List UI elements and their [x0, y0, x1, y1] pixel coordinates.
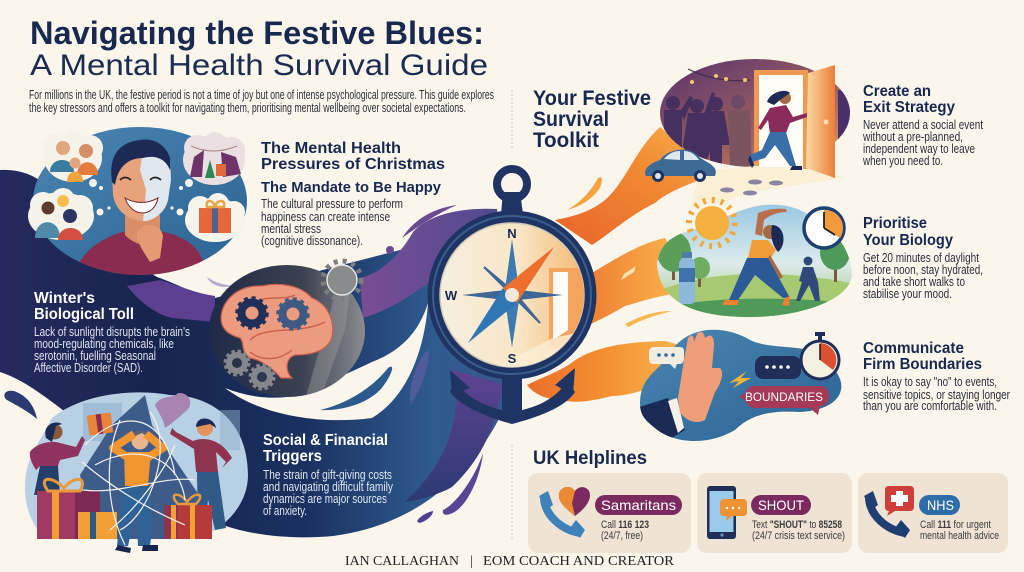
- heading: uk helplines: UK Helplines: [533, 448, 647, 469]
- text block: create an exit strategy: Exit Strategy: [863, 99, 955, 116]
- purple cloud: [155, 393, 190, 428]
- left woman: [30, 423, 85, 495]
- text block: winter's biological toll: [34, 290, 190, 375]
- anchor: [450, 368, 575, 424]
- text block: mandate to be happy: happiness can create intense: [261, 210, 390, 224]
- divider: [511, 90, 513, 540]
- text block: social and financial triggers: [263, 432, 394, 518]
- raised hand: [678, 332, 722, 422]
- compass ring loop: [497, 169, 527, 214]
- title: A Mental Health Survival Guide: [30, 49, 488, 82]
- pill: [919, 495, 960, 515]
- small walker: [796, 256, 820, 301]
- icon: phone with chat: [707, 486, 747, 539]
- text: (24/7, free): [601, 530, 643, 542]
- text block: winter's biological toll: Biological Toll: [34, 306, 134, 323]
- text block: mandate to be happy: mental stress: [261, 222, 321, 236]
- pill: NHS: [927, 497, 954, 513]
- text block: prioritise your biology: Your Biology: [863, 232, 953, 249]
- pill: Samaritans: [601, 497, 676, 513]
- text block: social and financial triggers: Triggers: [263, 448, 322, 465]
- text block: winter's biological toll: Affective Disorder (SAD).: [34, 361, 143, 375]
- text block: winter's biological toll: serotonin, fuelling Seasonal: [34, 349, 156, 363]
- text: Call 111 for urgent: [920, 519, 991, 531]
- pill: [595, 495, 682, 515]
- gift large left: [37, 479, 100, 539]
- footprints: [720, 180, 783, 196]
- compass letters: [445, 226, 517, 366]
- text: [920, 519, 999, 542]
- right tree: [820, 242, 849, 282]
- central person: [113, 430, 163, 553]
- parked car: [645, 150, 716, 182]
- gift right: [164, 495, 212, 539]
- illustration: leaving a party by the exit door: [645, 59, 852, 208]
- sun: [689, 200, 735, 246]
- orange flows to toolkit: [527, 127, 715, 402]
- compass star: [462, 240, 563, 347]
- left trees: [657, 232, 710, 287]
- footer credit: |: [470, 554, 473, 569]
- boundaries label: BOUNDARIES: [745, 390, 823, 404]
- text block: create an exit strategy: without a pre-planned,: [862, 130, 963, 144]
- text block: social and financial triggers: The strain of gift-giving costs: [263, 468, 392, 482]
- heading: your festive survival toolkit: [533, 87, 651, 152]
- text block: communicate firm boundaries: [863, 340, 1010, 413]
- thought cloud: friends: [28, 188, 94, 240]
- text block: communicate firm boundaries: Communicate: [863, 340, 964, 357]
- text block: social and financial triggers: dynamics are major sources: [263, 492, 387, 506]
- heading: your festive survival toolkit: Your Festive: [533, 87, 651, 110]
- text: (24/7 crisis text service): [752, 530, 845, 542]
- text block: winter's biological toll: Winter's: [34, 290, 95, 307]
- text: [752, 519, 845, 542]
- heading: mental health pressures: Pressures of Christmas: [261, 156, 445, 173]
- compass letters: S: [508, 351, 517, 366]
- text block: mandate to be happy: The Mandate to Be Happy: [261, 179, 442, 196]
- crowd silhouettes: [664, 92, 730, 167]
- text block: prioritise your biology: Prioritise: [863, 215, 927, 232]
- stopwatch: [801, 332, 839, 379]
- light floor path: [690, 166, 845, 208]
- illustration: brain with gears: [209, 261, 365, 400]
- illustration: man with smiling mask and thought clouds: [28, 127, 247, 275]
- footer credit: EOM COACH AND CREATOR: [483, 554, 675, 569]
- text block: prioritise your biology: before noon, stay hydrated,: [863, 263, 983, 277]
- thought cloud: gift: [185, 193, 245, 242]
- illustration: daylight, hydration and stretching: [657, 197, 852, 317]
- text block: create an exit strategy: [862, 83, 983, 168]
- gear navy: [237, 298, 267, 328]
- compass letters: N: [507, 226, 517, 241]
- text block: social and financial triggers: of anxiety.: [263, 504, 307, 518]
- heading: mental health pressures: The Mental Health: [261, 140, 401, 157]
- thought cloud: family: [43, 131, 103, 182]
- stretching woman: [722, 209, 790, 306]
- text block: communicate firm boundaries: Firm Boundaries: [863, 356, 982, 373]
- gear grey small: [250, 365, 274, 389]
- title: [30, 15, 488, 82]
- heading: mental health pressures: [261, 140, 445, 173]
- right man: [170, 418, 232, 535]
- left navy and blue flow: [0, 170, 510, 537]
- text block: prioritise your biology: stabilise your mood.: [863, 287, 952, 301]
- clock: [804, 208, 844, 248]
- text block: prioritise your biology: and take short walks to: [863, 275, 965, 289]
- text: Call 116 123: [601, 519, 649, 531]
- sun: [323, 261, 361, 299]
- title: Navigating the Festive Blues:: [30, 15, 484, 51]
- navy chat bubble: [755, 356, 801, 379]
- card: shout: [697, 473, 852, 553]
- text: mental health advice: [920, 530, 999, 542]
- illustration: tangled person with gifts: [25, 392, 248, 553]
- text block: create an exit strategy: Create an: [863, 83, 931, 100]
- icon: blue phone: [539, 491, 585, 538]
- text block: prioritise your biology: Get 20 minutes of daylight: [863, 251, 979, 265]
- icon: navy phone: [864, 491, 910, 538]
- text block: prioritise your biology: [863, 215, 983, 301]
- thought cloud: party: [183, 132, 245, 185]
- text block: mandate to be happy: (cognitive dissonance).: [261, 234, 363, 248]
- card: nhs: [858, 473, 1008, 553]
- text: [601, 519, 649, 542]
- illustration: hand raised for boundaries: [636, 330, 841, 445]
- card: samaritans: [528, 473, 691, 553]
- text block: create an exit strategy: independent way to leave: [863, 142, 975, 156]
- intro text: For millions in the UK, the festive period is not a time of joy but one of intense psychological pressure. This guide explores: [29, 88, 494, 102]
- text block: winter's biological toll: Lack of sunlight disrupts the brain's: [34, 325, 190, 339]
- drips and accent swooshes: [4, 205, 483, 523]
- intro text: the key stressors and offers a toolkit for navigating them, prioritising mental wellbeing over societal expectations.: [29, 101, 466, 115]
- pill: [751, 495, 811, 515]
- running woman: [748, 91, 807, 170]
- intro text: [29, 88, 494, 115]
- heading: your festive survival toolkit: Toolkit: [533, 129, 599, 152]
- icon: heart: [559, 487, 590, 516]
- icon: red cross bubble: [885, 486, 914, 516]
- text block: create an exit strategy: when you need to.: [862, 154, 943, 168]
- text block: create an exit strategy: Never attend a social event: [863, 118, 983, 132]
- lightning: [729, 371, 751, 388]
- chat bubble: [649, 347, 684, 369]
- gear blue: [278, 299, 308, 329]
- string lights: [688, 69, 750, 84]
- open door: [806, 65, 835, 178]
- web of tangled lines: [82, 412, 195, 545]
- text block: social and financial triggers: and navigating difficult family: [263, 480, 394, 494]
- gift small centre: [78, 512, 117, 539]
- compass letters: W: [445, 288, 458, 303]
- water bottle: [679, 252, 695, 304]
- compass: [428, 169, 596, 380]
- text block: mandate to be happy: [261, 179, 442, 248]
- sleeve: [640, 398, 685, 438]
- door frame: [754, 70, 808, 169]
- text: Text "SHOUT" to 85258: [752, 519, 842, 531]
- floating gift: [87, 412, 113, 436]
- text block: mandate to be happy: The cultural pressure to perform: [261, 197, 403, 211]
- pill: SHOUT: [758, 497, 804, 513]
- heading: your festive survival toolkit: Survival: [533, 108, 609, 131]
- text block: social and financial triggers: Social & Financial: [263, 432, 388, 449]
- gear grey: [225, 351, 249, 375]
- text block: winter's biological toll: mood-regulating chemicals, like: [34, 337, 174, 351]
- footer credit: IAN CALLAGHAN: [345, 554, 459, 569]
- footer credit: [345, 554, 675, 569]
- boundaries label: [739, 386, 829, 415]
